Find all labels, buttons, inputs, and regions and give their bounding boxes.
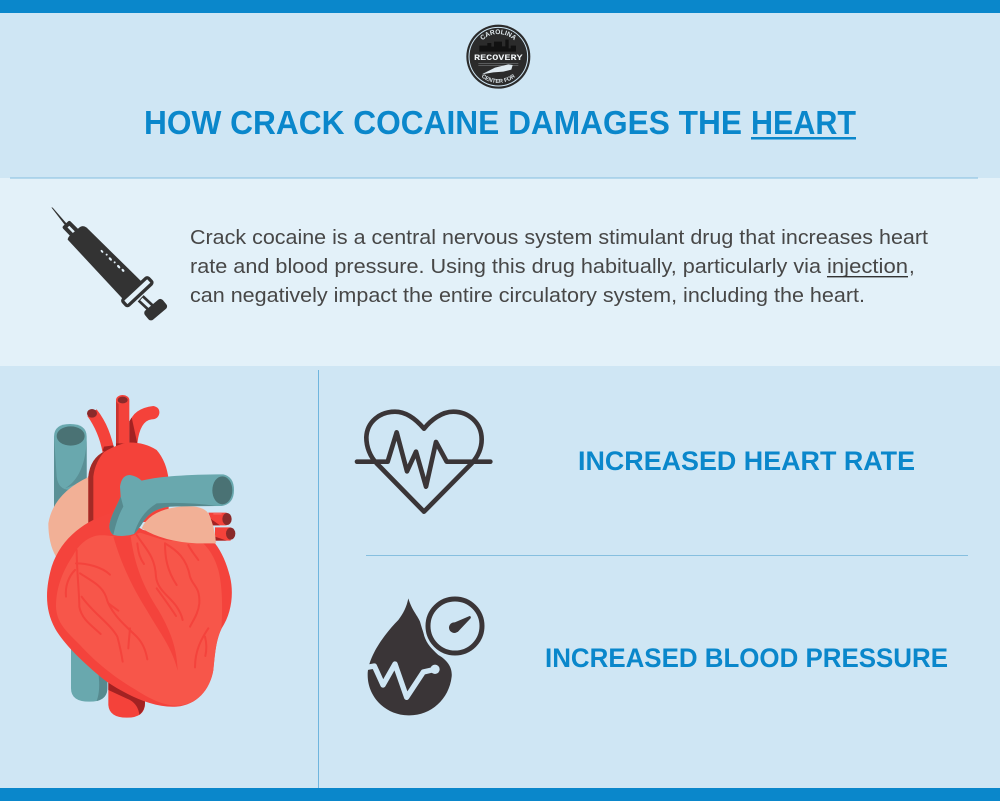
title: HEART [751, 104, 856, 141]
right pulmonary vessels [208, 513, 235, 541]
heart body [47, 513, 232, 707]
pulmonary artery [109, 474, 234, 536]
heart front muscle [56, 533, 222, 706]
superior vena cava [54, 424, 87, 513]
central coronary artery [113, 537, 178, 671]
logo: Carolina Recovery Center: CENTER FOR [482, 74, 516, 83]
logo: Carolina Recovery Center: CAROLINA [480, 29, 516, 40]
bottom bar [0, 788, 1000, 801]
peach right atrium [142, 506, 216, 543]
intro text: rate and blood pressure. Using this drug habitually, particularly via [190, 255, 822, 278]
intro text: can negatively impact the entire circulatory system, including the heart. [190, 284, 865, 307]
intro text: Crack cocaine is a central nervous system stimulant drug that increases heart [190, 226, 928, 249]
coronary vessels [66, 535, 208, 667]
label: increased blood pressure: INCREASED BLOOD PRESSURE [545, 643, 948, 673]
label: increased heart rate: INCREASED HEART RATE [578, 446, 915, 476]
logo: Carolina Recovery Center [466, 24, 530, 89]
icon: syringe [51, 207, 168, 322]
top bar [0, 0, 1000, 13]
logo: Carolina Recovery Center: RECOVERY [474, 53, 523, 63]
descending aorta [108, 673, 145, 718]
inferior vena cava [71, 643, 107, 702]
icon: blood drop with gauge [367, 594, 487, 715]
intro text: , [909, 255, 915, 278]
title: HOW CRACK COCAINE DAMAGES THE [144, 104, 742, 141]
peach left atrium [48, 477, 90, 557]
aortic arch [88, 443, 169, 527]
aortic branches [87, 395, 159, 453]
icon: heart with pulse [357, 412, 490, 512]
panel: intro band [0, 178, 1000, 366]
intro text: injection [827, 255, 908, 278]
intro text [190, 226, 928, 307]
illustration: anatomical heart [47, 395, 235, 718]
